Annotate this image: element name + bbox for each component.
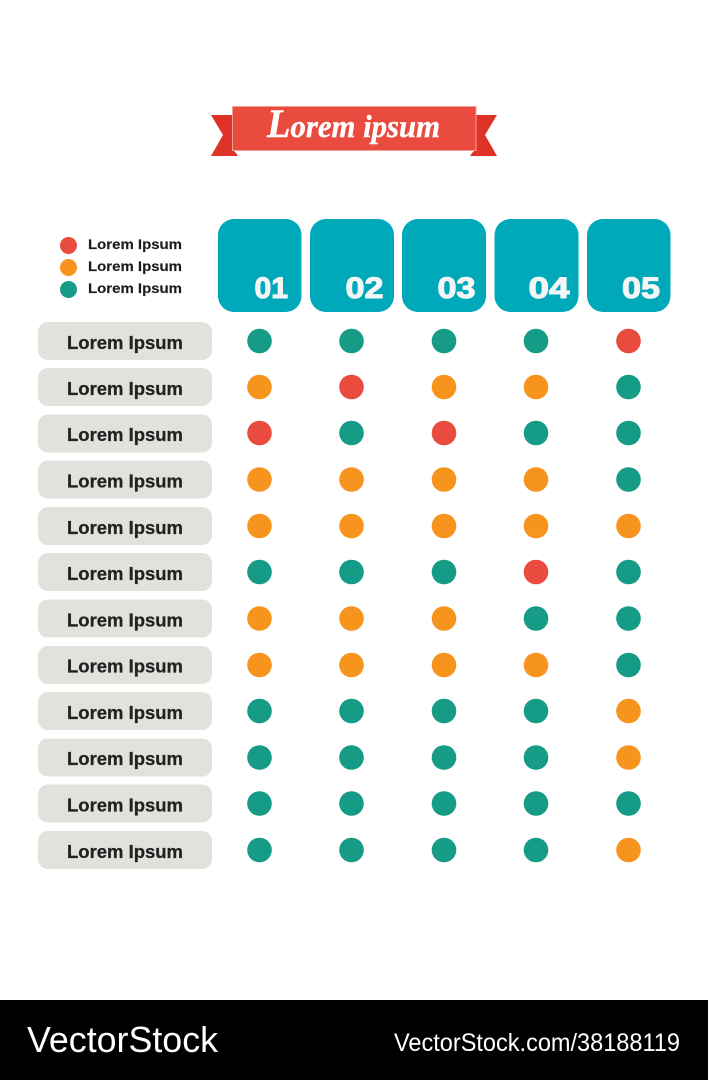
row labels: Lorem Ipsum	[67, 796, 183, 816]
column headers	[218, 219, 670, 312]
footer bar: VectorStock	[27, 1019, 219, 1060]
column headers: 03	[438, 272, 476, 305]
title ribbon	[211, 101, 497, 156]
row labels: Lorem Ipsum	[67, 842, 183, 862]
column headers: 01	[254, 272, 288, 305]
legend: Lorem Ipsum	[88, 280, 182, 296]
row labels: Lorem Ipsum	[67, 610, 183, 630]
column headers: 05	[622, 272, 660, 305]
footer bar: VectorStock.com/38188119	[394, 1029, 680, 1057]
row labels: Lorem Ipsum	[67, 379, 183, 399]
row labels: Lorem Ipsum	[67, 518, 183, 538]
footer bar	[0, 1000, 708, 1080]
row labels: Lorem Ipsum	[67, 749, 183, 769]
row labels: Lorem Ipsum	[67, 425, 183, 445]
row labels: Lorem Ipsum	[67, 703, 183, 723]
legend	[60, 236, 182, 298]
row labels: Lorem Ipsum	[67, 564, 183, 584]
column headers: 04	[528, 272, 570, 305]
row labels: Lorem Ipsum	[67, 472, 183, 492]
row labels	[38, 322, 212, 869]
column headers: 02	[346, 272, 384, 305]
legend: Lorem Ipsum	[88, 236, 182, 252]
row labels: Lorem Ipsum	[67, 656, 183, 676]
row labels: Lorem Ipsum	[67, 333, 183, 353]
legend: Lorem Ipsum	[88, 258, 182, 274]
status dots matrix	[247, 329, 641, 862]
title text: Lorem ipsum	[266, 101, 440, 146]
